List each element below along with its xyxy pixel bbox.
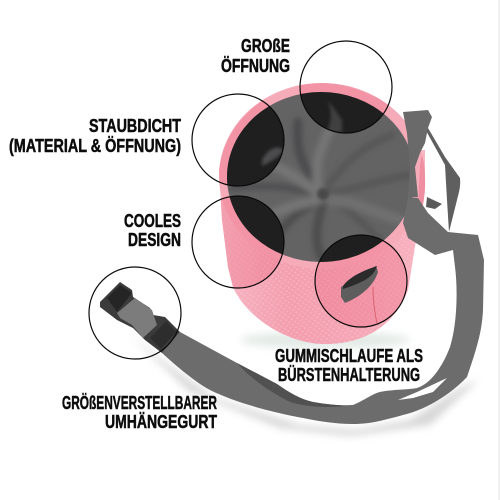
circle: opening (300, 41, 392, 133)
darkened detail inside callout circles (219, 83, 406, 326)
bag rim (219, 83, 425, 269)
circle: design (192, 196, 284, 288)
seam (373, 287, 377, 323)
small strap tie (426, 197, 442, 209)
strap shadow (130, 335, 478, 436)
label: große öffnung: ÖFFNUNG (221, 56, 290, 76)
page edge (498, 0, 500, 500)
icon: thin strap loop behind the bag (424, 127, 460, 232)
strap underside (237, 363, 353, 407)
icon: buckle (100, 282, 180, 353)
label: gummischlaufe: BÜRSTENHALTERUNG (278, 365, 420, 385)
callout circles (89, 41, 407, 359)
label: gummischlaufe (275, 346, 423, 385)
label: umhängegurt: UMHÄNGEGURT (105, 412, 217, 432)
label: cooles design: COOLES (124, 211, 181, 231)
pink right edge of bag (418, 155, 425, 210)
strap gap (398, 378, 447, 400)
label: staubdicht: STAUBDICHT (89, 116, 181, 136)
label: staubdicht: (MATERIAL & ÖFFNUNG) (9, 136, 181, 156)
label: cooles design: DESIGN (128, 230, 181, 250)
circle: dustproof (192, 94, 284, 186)
bag interior (227, 92, 415, 262)
circle: loop (315, 235, 407, 327)
panel: bag (219, 83, 442, 349)
label: cooles design (124, 211, 181, 250)
label: gummischlaufe: GUMMISCHLAUFE ALS (275, 346, 423, 366)
label: große öffnung (221, 36, 290, 76)
vertical strap on rim (403, 110, 432, 197)
bag body (219, 150, 425, 344)
circle: buckle (89, 267, 181, 359)
label: umhängegurt: GRÖßENVERSTELLBARER (62, 393, 217, 413)
label: staubdicht (9, 116, 181, 156)
bag floor shadow (240, 331, 410, 349)
icon: shoulder strap (162, 110, 484, 424)
bag body highlight (219, 150, 425, 344)
interior pleats (232, 118, 410, 262)
icon: elastic brush loop (341, 266, 378, 303)
main strap (162, 197, 484, 424)
label: große öffnung: GROßE (241, 36, 290, 56)
label: umhängegurt (62, 393, 217, 432)
